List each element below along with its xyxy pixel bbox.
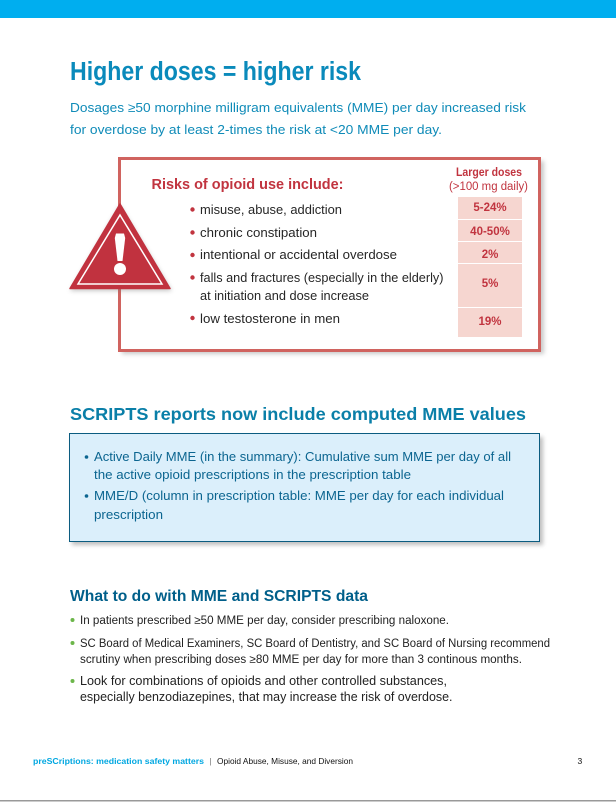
section heading: SCRIPTS reports: SCRIPTS reports now include computed MME values — [70, 404, 526, 424]
panel: computed MME values: prescription — [94, 507, 163, 522]
guidance list: scrutiny when prescribing doses ≥80 MME per day for more than 3 continous months. — [80, 654, 522, 666]
footer: Opioid Abuse, Misuse, and Diversion — [217, 756, 353, 766]
panel: computed MME values: MME/D (column in prescription table: MME per day for each individual — [94, 488, 504, 503]
intro text: Dosages ≥50 morphine milligram equivalents (MME) per day increased risk — [70, 100, 527, 115]
panel: risks of opioid use — [120, 158, 544, 354]
footer — [33, 756, 582, 766]
top banner — [0, 0, 616, 18]
intro text — [70, 100, 527, 137]
percentage table — [458, 197, 522, 337]
footer: 3 — [578, 756, 582, 766]
percentage table: 5-24% — [473, 202, 507, 214]
risk list: falls and fractures (especially in the elderly) — [200, 271, 444, 285]
panel: computed MME values: the active opioid prescriptions in the prescription table — [94, 467, 411, 482]
risk list: chronic constipation — [200, 226, 317, 240]
guidance list: Look for combinations of opioids and other controlled substances, — [80, 674, 447, 688]
bottom rule — [0, 800, 616, 802]
column header: larger doses — [449, 167, 528, 193]
percentage table: 40-50% — [470, 226, 510, 238]
guidance list: SC Board of Medical Examiners, SC Board of Dentistry, and SC Board of Nursing recommend — [80, 638, 550, 650]
risk list: at initiation and dose increase — [200, 289, 369, 303]
risks heading: Risks of opioid use include: — [152, 177, 344, 193]
title: Higher doses = higher risk — [70, 58, 362, 86]
percentage table: 5% — [482, 278, 498, 290]
percentage table: 19% — [478, 316, 502, 328]
panel: computed MME values — [70, 434, 543, 545]
percentage table: 2% — [482, 249, 498, 261]
risk list — [190, 203, 444, 326]
column header: larger doses: (>100 mg daily) — [449, 181, 528, 193]
risk list: intentional or accidental overdose — [200, 248, 397, 262]
guidance list — [70, 615, 550, 704]
column header: larger doses: Larger doses — [456, 167, 522, 179]
footer: preSCriptions: medication safety matters — [33, 756, 204, 766]
guidance list: especially benzodiazepines, that may increase the risk of overdose. — [80, 690, 452, 704]
panel: computed MME values: Active Daily MME (in the summary): Cumulative sum MME per day of all — [94, 449, 511, 464]
guidance list: In patients prescribed ≥50 MME per day, consider prescribing naloxone. — [80, 615, 449, 627]
risk list: misuse, abuse, addiction — [200, 203, 342, 217]
icon: warning triangle — [70, 204, 172, 291]
footer: | — [210, 756, 212, 766]
risk list: low testosterone in men — [200, 312, 340, 326]
section heading: what to do: What to do with MME and SCRIPTS data — [70, 588, 368, 605]
intro text: for overdose by at least 2-times the risk at <20 MME per day. — [70, 122, 442, 137]
